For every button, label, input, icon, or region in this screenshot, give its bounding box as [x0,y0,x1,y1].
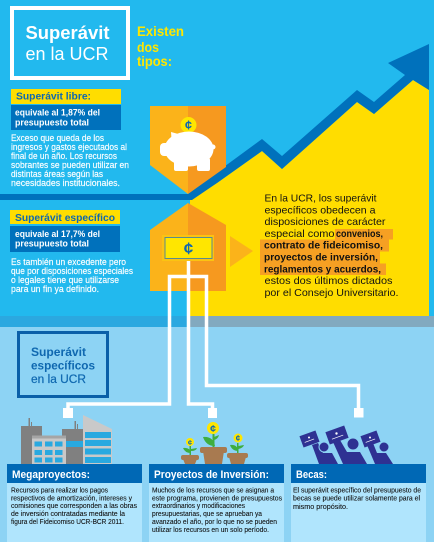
heading: existen dos tipos [137,24,184,69]
card: proyectos de inversión: avanzado el año, por lo que no se pueden [152,517,277,526]
text block: specific surpluses explanation: disposiciones de carácter [264,217,386,228]
card: proyectos de inversión [149,464,284,542]
icon: buildings [21,415,112,464]
panel: superávit libre: distintas áreas según las [11,169,103,179]
panel: superávit específico: para un fin ya definido. [11,284,99,294]
panel: superávit específico: Es también un excedente pero [11,257,126,267]
heading box: superávit específicos: específicos [31,360,95,372]
text block: specific surpluses explanation: por el Consejo Universitario. [264,288,398,299]
connector end squares [63,408,364,418]
icon: flower pots with coins: ¢ [236,434,241,443]
card: becas: mismo propósito. [293,502,348,511]
title box [12,8,128,78]
card: proyectos de inversión: Proyectos de Inversión: [154,469,269,481]
icon: flower pots with coins: ¢ [188,438,192,447]
panel: superávit libre: Superávit libre: [16,92,91,102]
heading: existen dos tipos: Existen [137,24,184,39]
card: megaproyectos: Recursos para realizar los pagos [11,486,108,494]
title box: en la UCR [26,43,108,64]
text block: specific surpluses explanation: especial como [264,229,335,240]
icon: piggy bank shield: ¢ [185,118,192,132]
card: megaproyectos: Megaproyectos: [12,469,90,481]
connector lines to the three categories [68,261,358,410]
panel: superávit libre [11,89,129,188]
card: megaproyectos: de inversión contratadas mediante la [11,509,126,518]
panel: superávit específico: equivale al 17,7% del [15,229,100,239]
heading: existen dos tipos: dos [137,40,159,55]
card: becas [291,464,426,542]
icon: flower pots with coins [181,422,248,464]
text block: specific surpluses explanation: contrato de fideicomiso, [264,241,383,252]
text block: specific surpluses explanation: estos dos últimos dictados [264,276,392,287]
icon: house with colón bill [150,203,226,291]
card: becas: Becas: [296,469,327,481]
card: megaproyectos: figura del Fideicomiso UCR-BCR 2011. [11,517,124,526]
card: megaproyectos [7,464,142,542]
card: proyectos de inversión: este programa, provienen de presupuestos [152,493,282,502]
text block: specific surpluses explanation: En la UCR, los superávit [264,194,377,204]
card: proyectos de inversión: Muchos de los recursos que se asignan a [152,486,275,494]
panel: superávit específico: o legales tiene que utilizarse [11,275,119,285]
card: proyectos de inversión: presupuestarias, que se aprueban ya [152,509,263,518]
icon: flower pots with coins: ¢ [210,423,216,435]
yellow area under the growth arrow [190,80,429,316]
text block: specific surpluses explanation: convenios, [336,229,383,240]
text block: specific surpluses explanation: proyectos de inversión, [264,252,378,264]
panel: superávit específico: que por disposiciones especiales [11,266,133,276]
heading box: superávit específicos [18,332,108,396]
text block: specific surpluses explanation: específicos obedecen a [264,205,376,216]
growth arrow [0,44,429,200]
card: proyectos de inversión: utilizar los recursos en un solo período. [152,525,269,534]
heading: existen dos tipos: tipos: [137,54,172,69]
panel: superávit libre: presupuesto total [15,118,89,128]
panel: superávit libre: necesidades institucionales. [11,178,120,188]
card: becas: El superávit específico del presupuesto de [293,486,421,494]
panel: superávit libre: sobrantes se pueden utilizar en [11,160,129,170]
card: becas: becas se puede utilizar solamente para el [293,494,420,502]
icon: house with colón bill: ¢ [184,239,194,258]
panel: superávit específico [10,210,133,294]
panel: superávit libre: ingresos y gastos ejecutados al [11,142,127,152]
text block: specific surpluses explanation [260,194,398,299]
icon: students holding signs [299,425,393,464]
title box: Superávit [26,22,110,43]
card: megaproyectos: respectivos de amortización, intereses y [11,493,132,502]
arrow: triangle pointing to text [230,236,253,267]
panel: superávit específico: presupuesto total [15,238,89,248]
text block: specific surpluses explanation: reglamentos y acuerdos, [264,264,381,275]
heading box: superávit específicos: en la UCR [31,374,86,386]
icon: piggy bank shield [150,106,226,194]
panel: superávit libre: equivale al 1,87% del [15,108,100,118]
panel: superávit libre: final de un año. Los recursos [11,151,117,161]
heading box: superávit específicos: Superávit [31,347,86,359]
panel: superávit específico: Superávit específico [15,213,115,224]
lower section background [0,316,434,542]
card: proyectos de inversión: extraordinarios y modificaciones [152,501,245,510]
panel: superávit libre: Exceso que queda de los [11,133,104,143]
card: megaproyectos: comisiones que corresponden a las obras [11,501,137,510]
